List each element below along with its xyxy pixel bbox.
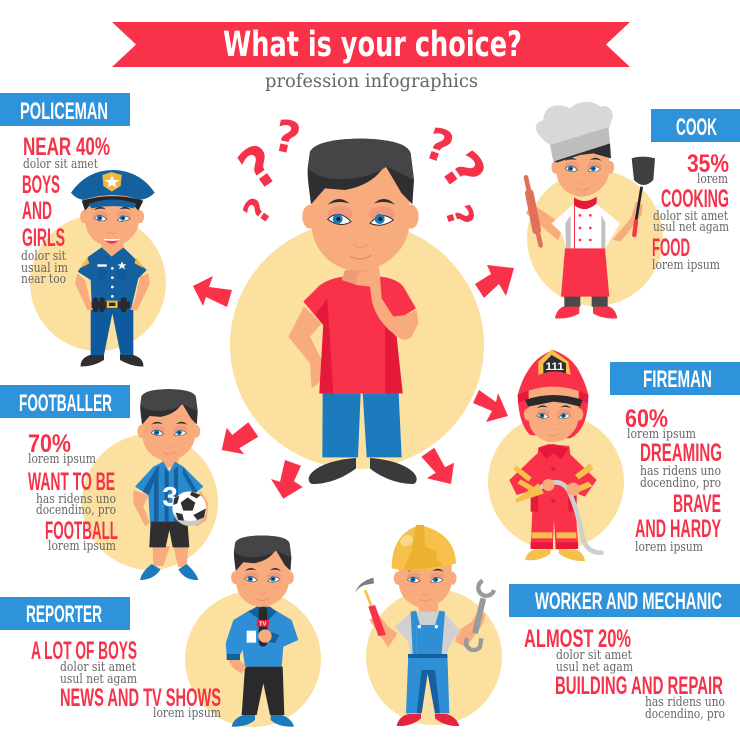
text: worker and mechanic: usul net agam (556, 660, 633, 675)
banner: fireman (610, 362, 740, 395)
text: worker and mechanic: ALMOST 20% (524, 625, 631, 653)
text: footballer: 70% (28, 430, 71, 458)
text: cook: FOOD (652, 234, 690, 262)
question marks: ? (227, 132, 291, 204)
text: footballer: WANT TO BE (28, 468, 115, 496)
text: cook: 35% (687, 150, 729, 178)
banner: cook (651, 109, 740, 142)
title: What is your choice? (223, 25, 522, 65)
question marks: ? (436, 200, 482, 233)
banner: policeman (0, 93, 130, 126)
text: worker and mechanic (524, 625, 725, 722)
cook figure (526, 102, 655, 318)
reporter figure (226, 535, 298, 727)
text: cook: lorem (697, 172, 728, 187)
arrow to footballer (222, 422, 258, 454)
title ribbon (112, 22, 630, 67)
subtitle: profession infographics (265, 70, 478, 92)
panel: policeman (0, 93, 155, 367)
fireman figure (509, 349, 602, 561)
circle: fireman (488, 414, 624, 550)
circle: policeman (30, 215, 166, 351)
text: cook (652, 150, 729, 273)
circle: reporter (185, 591, 321, 727)
circle: central (230, 221, 484, 469)
footballer figure: 3 (162, 481, 178, 512)
arrow to reporter (271, 460, 303, 499)
text: footballer: lorem ipsum (28, 452, 96, 467)
panel: cook (526, 102, 740, 318)
text: reporter: dolor sit amet (60, 660, 137, 675)
footballer figure (133, 389, 208, 580)
arrows (193, 265, 514, 499)
text: policeman: BOYS (22, 171, 60, 199)
text: worker and mechanic: has ridens uno (645, 695, 725, 710)
text: cook: lorem ipsum (652, 258, 720, 273)
text: policeman (21, 133, 110, 287)
text: policeman: usual im (21, 261, 68, 276)
arrow to worker (421, 448, 454, 484)
text: fireman: has ridens uno (640, 464, 721, 479)
banner: policeman: POLICEMAN (20, 98, 108, 125)
banner: footballer: FOOTBALLER (19, 390, 112, 417)
arrow to policeman (193, 276, 232, 307)
text: footballer (28, 430, 118, 554)
worker figure (355, 525, 494, 726)
text: reporter: usul net agam (60, 672, 137, 687)
text: policeman: near too (21, 272, 66, 287)
text: footballer: has ridens uno (36, 492, 116, 507)
circle: cook (527, 170, 663, 306)
question marks: ? (236, 191, 281, 232)
question marks: ? (428, 140, 498, 202)
text: reporter (31, 637, 221, 721)
text: reporter: NEWS AND TV SHOWS (60, 684, 221, 712)
text: worker and mechanic: dolor sit amet (556, 648, 633, 663)
text: policeman: NEAR 40% (23, 133, 110, 161)
text: reporter: lorem ipsum (153, 706, 221, 721)
panel: fireman (509, 349, 740, 561)
text: fireman: lorem ipsum (627, 427, 696, 442)
central thinking boy (288, 139, 419, 484)
text: policeman: dolor sit (21, 249, 67, 264)
panel: footballer (0, 385, 208, 580)
banner: footballer (0, 385, 130, 418)
text: fireman: lorem ipsum (635, 540, 703, 555)
reporter figure: TV (259, 622, 267, 628)
text: footballer: FOOTBALL (45, 517, 118, 545)
circle: worker (366, 589, 502, 725)
text: reporter: A LOT OF BOYS (31, 637, 137, 665)
text: footballer: docendino, pro (36, 503, 116, 518)
question marks (227, 110, 498, 233)
text: fireman: 60% (625, 405, 668, 433)
text: footballer: lorem ipsum (48, 539, 116, 554)
arrow to cook (475, 265, 514, 298)
arrow to fireman (473, 390, 508, 422)
text: policeman: dolor sit amet (23, 157, 99, 172)
question marks: ? (269, 110, 305, 165)
text: policeman: AND (22, 197, 52, 225)
panel: worker and mechanic (355, 525, 740, 726)
fireman figure: 111 (545, 361, 564, 373)
banner: reporter: REPORTER (26, 601, 102, 628)
panel: reporter (0, 535, 298, 727)
policeman figure (71, 170, 155, 367)
question marks: ? (418, 118, 460, 175)
banner: reporter (0, 597, 130, 630)
circle: footballer (82, 434, 218, 570)
text: policeman: GIRLS (22, 224, 65, 252)
text: fireman: docendino, pro (640, 476, 721, 491)
text: fireman (625, 405, 722, 555)
